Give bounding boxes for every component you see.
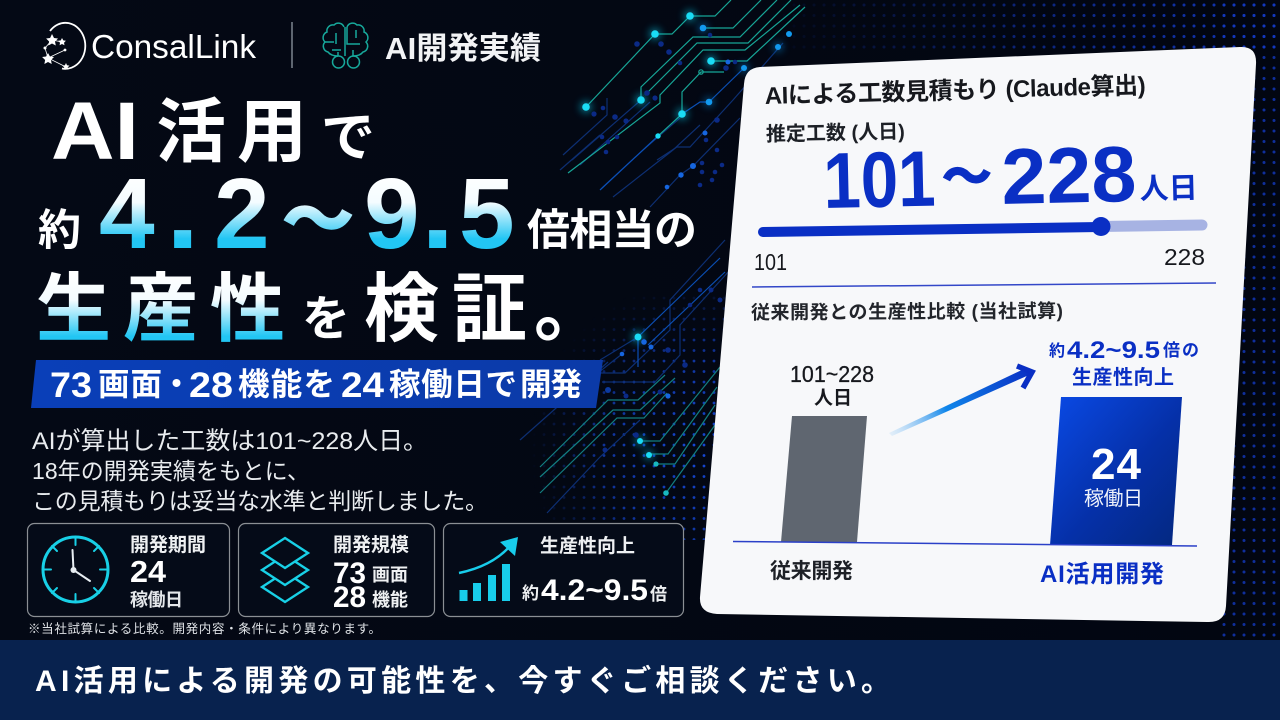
title line 3: 。 [534,271,606,351]
footer call to action [0,640,1280,720]
title [36,86,697,351]
big estimate value [822,128,1198,225]
icon: clock [43,537,108,602]
bar: AI development: 稼働日 [1084,487,1143,510]
divider [291,22,293,68]
icon: constellation circle [42,23,85,70]
brand sub label: AI開発実績 [385,31,541,66]
bar: AI development: 24 [1091,440,1142,489]
stat box: productivity: 4.2~9.5 [541,574,648,607]
background [533,4,1276,636]
stat box: development scale: 機能 [372,590,408,610]
big estimate value: 〜 [942,150,992,205]
axis label: traditional: 従来開発 [770,560,853,583]
banner: project summary: 稼働日で [389,366,517,402]
bar: traditional development: 101~228 [790,361,874,387]
banner: project summary: 開発 [520,366,582,402]
banner: project summary [31,360,603,408]
panel: estimate card [700,47,1256,622]
stat box: productivity: 約 [522,584,539,603]
bar: traditional development [781,361,874,542]
big estimate value: 101 [822,134,936,225]
title line 2: 約 [38,207,81,255]
body text: この見積もりは妥当な水準と判断しました。 [32,488,488,514]
stat box: development period [28,524,230,616]
axis label: AI: AI活用開発 [1040,561,1164,588]
slider labels: 228 [1164,244,1205,270]
stat box: development scale [238,524,434,616]
slider [763,217,1202,236]
title line 3: を [302,293,350,346]
banner: project summary: 73 [50,366,92,405]
icon: AI brain [323,23,368,68]
title line 2: 倍相当の [527,207,697,255]
chart baseline [733,542,1197,546]
stat box: development scale: 画面 [372,565,408,585]
icon: layers [262,538,308,602]
banner: project summary: 画面 [98,366,162,402]
stat box: development period: 稼働日 [130,590,183,610]
improvement label: 4.2~9.5 [1067,337,1160,364]
estimate label: 推定工数 (人日) [766,120,905,146]
stat box: productivity: 倍 [650,585,667,604]
title line 1: AI [51,86,139,177]
title line 2: . [166,140,199,274]
banner: project summary: 24 [341,366,385,405]
title line 1: で [321,108,375,168]
title line 3: 検証 [364,267,527,351]
improvement label: 生産性向上 [1072,366,1174,389]
title line 1 [51,86,375,177]
title line 2: . [421,140,454,274]
circuit board decoration [520,0,805,513]
card heading: AIによる工数見積もり (Claude算出) [764,72,1146,110]
stat box: development period: 24 [130,554,167,589]
logo: ConsalLink [42,23,256,70]
bar: AI development [1050,397,1182,545]
big estimate value: 人日 [1139,173,1198,206]
body text: AIが算出した工数は101~228人日。 [32,427,428,455]
title line 3 [36,267,606,351]
comparison heading: 従来開発との生産性比較 (当社試算) [751,299,1063,324]
banner: project summary: 機能を [238,366,335,402]
stat box: development period: 開発期間 [130,534,206,556]
title line 2: 〜 [283,181,353,259]
improvement label: 約 [1049,342,1065,360]
footer call to action: AI活用による開発の可能性を、今すぐご相談ください。 [35,664,891,698]
section divider [752,283,1216,287]
title line 2: 4295 [99,158,515,270]
logo: ConsalLink: ConsalLink [91,28,256,65]
stat box: development scale: 28 [333,581,366,614]
big estimate value: 228 [1000,129,1137,221]
arrow [889,366,1032,436]
stat box: development scale: 73 [333,557,366,590]
improvement label [1049,337,1199,389]
title line 1: 活用 [156,93,307,171]
footnote: ※当社試算による比較。開発内容・条件により異なります。 [28,621,381,636]
icon: growth chart [459,537,518,601]
banner: project summary: 28 [189,366,233,405]
slider labels [754,244,1205,275]
stat box: development scale: 開発規模 [333,534,409,556]
bar: traditional development: 人日 [814,388,852,409]
stat box: productivity [444,524,684,616]
stat box: productivity: 生産性向上 [540,535,635,557]
banner: project summary: ・ [161,367,192,402]
improvement label: 倍の [1163,341,1199,360]
slider labels: 101 [754,249,787,275]
title line 2 [38,140,697,274]
body text [32,427,488,514]
title line 3: 生産性 [36,267,285,351]
body text: 18年の開発実績をもとに、 [32,458,310,484]
